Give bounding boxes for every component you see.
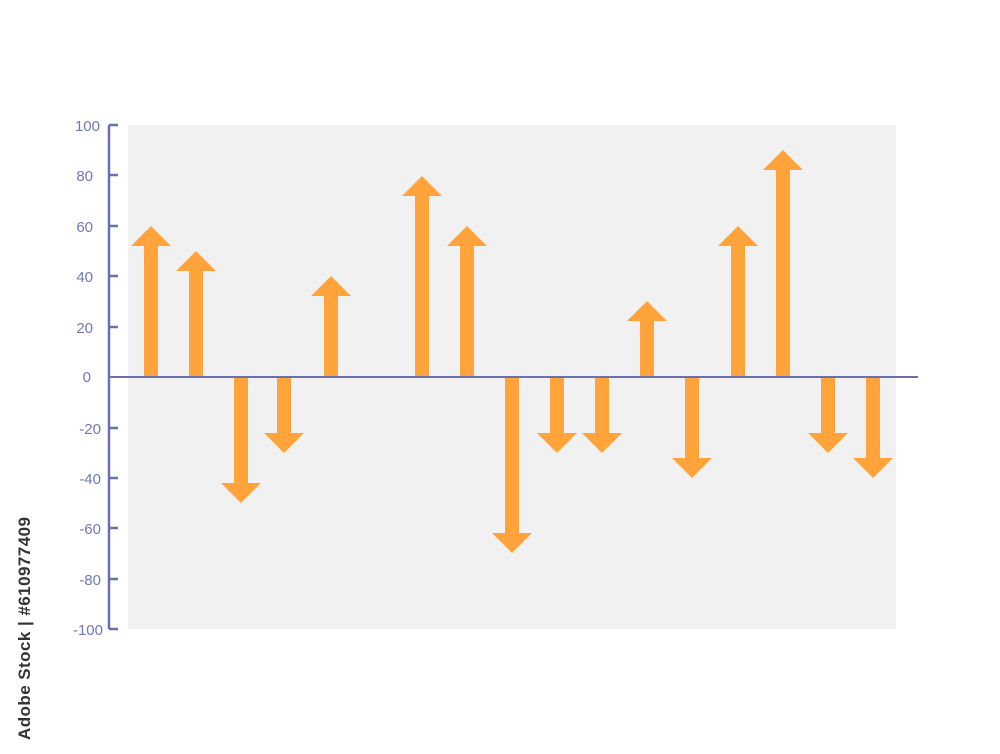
y axis labels: 40 [76, 269, 93, 286]
y axis labels [73, 118, 103, 639]
y axis [109, 125, 118, 629]
y axis labels: 0 [83, 369, 91, 386]
arrows [131, 150, 893, 553]
y axis labels: -80 [79, 572, 101, 589]
watermark id: Adobe Stock | #610977409 [15, 517, 34, 740]
y axis labels: -20 [79, 421, 101, 438]
y axis labels: 80 [76, 168, 93, 185]
y axis labels: -100 [73, 622, 103, 639]
y axis labels: 60 [76, 219, 93, 236]
y axis labels: -40 [79, 471, 101, 488]
y axis labels: -60 [79, 521, 101, 538]
zero line [109, 376, 918, 378]
y axis labels: 100 [75, 118, 100, 135]
y axis labels: 20 [76, 320, 93, 337]
plot background [128, 125, 896, 629]
